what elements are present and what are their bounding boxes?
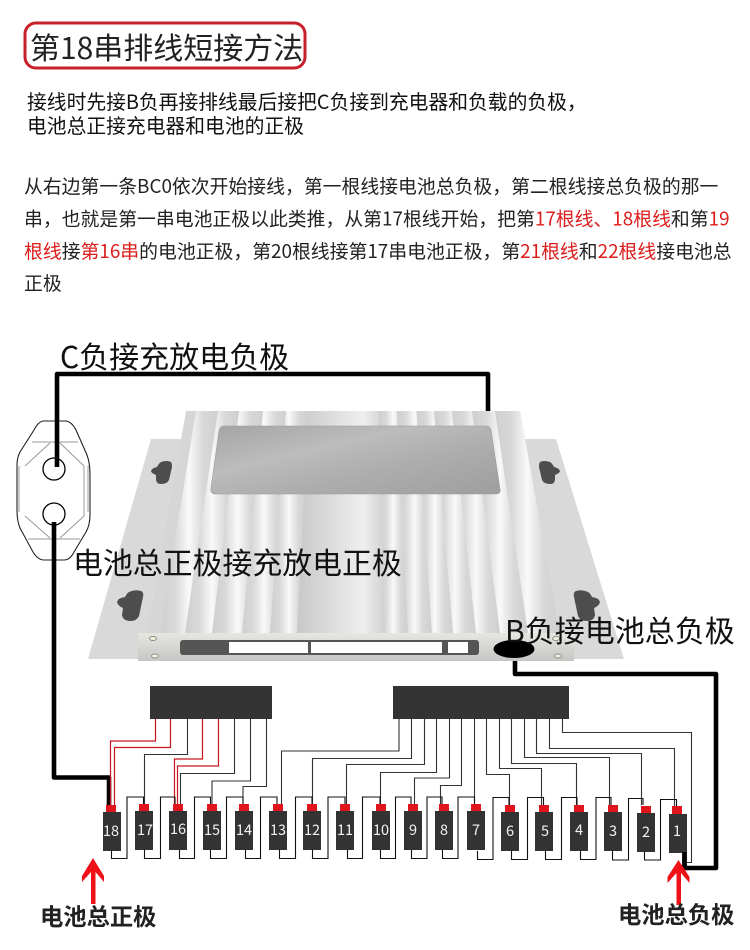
cell 7: 7 [472,819,480,840]
right connector [393,686,569,719]
label: positive to charge: 电池总正极接充放电正极 [73,539,402,583]
charge/discharge plug [17,421,90,560]
front slot [180,640,479,655]
cell 13 [269,804,287,850]
mounting slots [117,461,600,621]
cell 14: 14 [236,819,252,840]
title box [25,23,305,68]
cell 9 [404,804,422,850]
cell 3 [604,805,622,851]
cell 8: 8 [440,819,448,840]
cell 5: 5 [541,820,549,841]
cell 18 [103,805,121,851]
plug outline [17,421,90,560]
cell 6 [501,805,519,851]
cell 8 [435,804,453,850]
cell 15 [203,804,221,850]
top window panel [211,426,500,494]
label: battery negative: 电池总负极 [618,902,734,928]
cable over cell 1 [682,852,687,868]
cable hole [494,640,534,658]
plug sockets [43,458,65,525]
cell 1 [669,806,687,853]
cell 12 [303,804,321,850]
wiring instructions paragraph: 串，也就是第一串电池正极以此类推，从第17根线开始，把第17根线、18根线和第19 [24,204,730,232]
cell 2 [637,806,655,852]
cell 4 [570,805,588,851]
battery negative cable [515,661,716,868]
cell 6: 6 [506,820,514,841]
left connector [150,686,272,719]
wiring instructions paragraph: 正极 [24,269,62,296]
cell 3: 3 [609,820,617,841]
cell 10 [372,804,390,850]
negative charge cable [57,374,488,467]
cell 10: 10 [373,819,389,840]
cell 2: 2 [642,821,650,842]
title text: 第18串排线短接方法 [30,24,303,68]
cell 11 [336,804,354,850]
plug inner lines [19,442,88,539]
screws [150,636,562,658]
right connector wires [282,719,692,862]
label: battery positive: 电池总正极 [40,904,156,930]
cell 17 [135,804,153,850]
intro text: 电池总正接充电器和电池的正极 [27,110,304,139]
BMS module [88,411,624,661]
mounting plate [88,439,624,659]
front face [138,633,574,661]
cell 14 [235,804,253,850]
arrow: negative terminal [668,860,690,905]
left connector wires [110,719,266,805]
cell 15: 15 [204,819,220,840]
cell 17: 17 [137,819,153,840]
wiring instructions paragraph: 从右边第一条BC0依次开始接线，第一根线接电池总负极，第二根线接总负极的那一 [24,172,719,199]
cell 7 [467,804,485,850]
label: B negative: B负接电池总负极 [505,607,735,651]
cell 4: 4 [575,819,583,840]
positive cable [54,522,109,805]
cell 16: 16 [170,818,186,839]
label: C negative: C负接充放电负极 [60,333,289,377]
cell 13: 13 [270,819,286,840]
cell 9: 9 [409,819,417,840]
ribbed heatsink body [147,411,560,633]
series links between cells [112,797,676,860]
cell 5 [535,805,553,851]
cell 18: 18 [103,820,119,841]
cell 12: 12 [304,819,320,840]
cell 16 [169,804,187,850]
title border [25,23,305,68]
cell 1: 1 [673,820,681,841]
cell 11: 11 [337,819,353,840]
wiring instructions paragraph: 根线接第16串的电池正极，第20根线接第17串电池正极，第21根线和22根线接电池总 [24,237,732,264]
arrow: positive terminal [82,858,104,904]
intro text: 接线时先接B负再接排线最后接把C负接到充电器和负载的负极， [27,86,587,115]
